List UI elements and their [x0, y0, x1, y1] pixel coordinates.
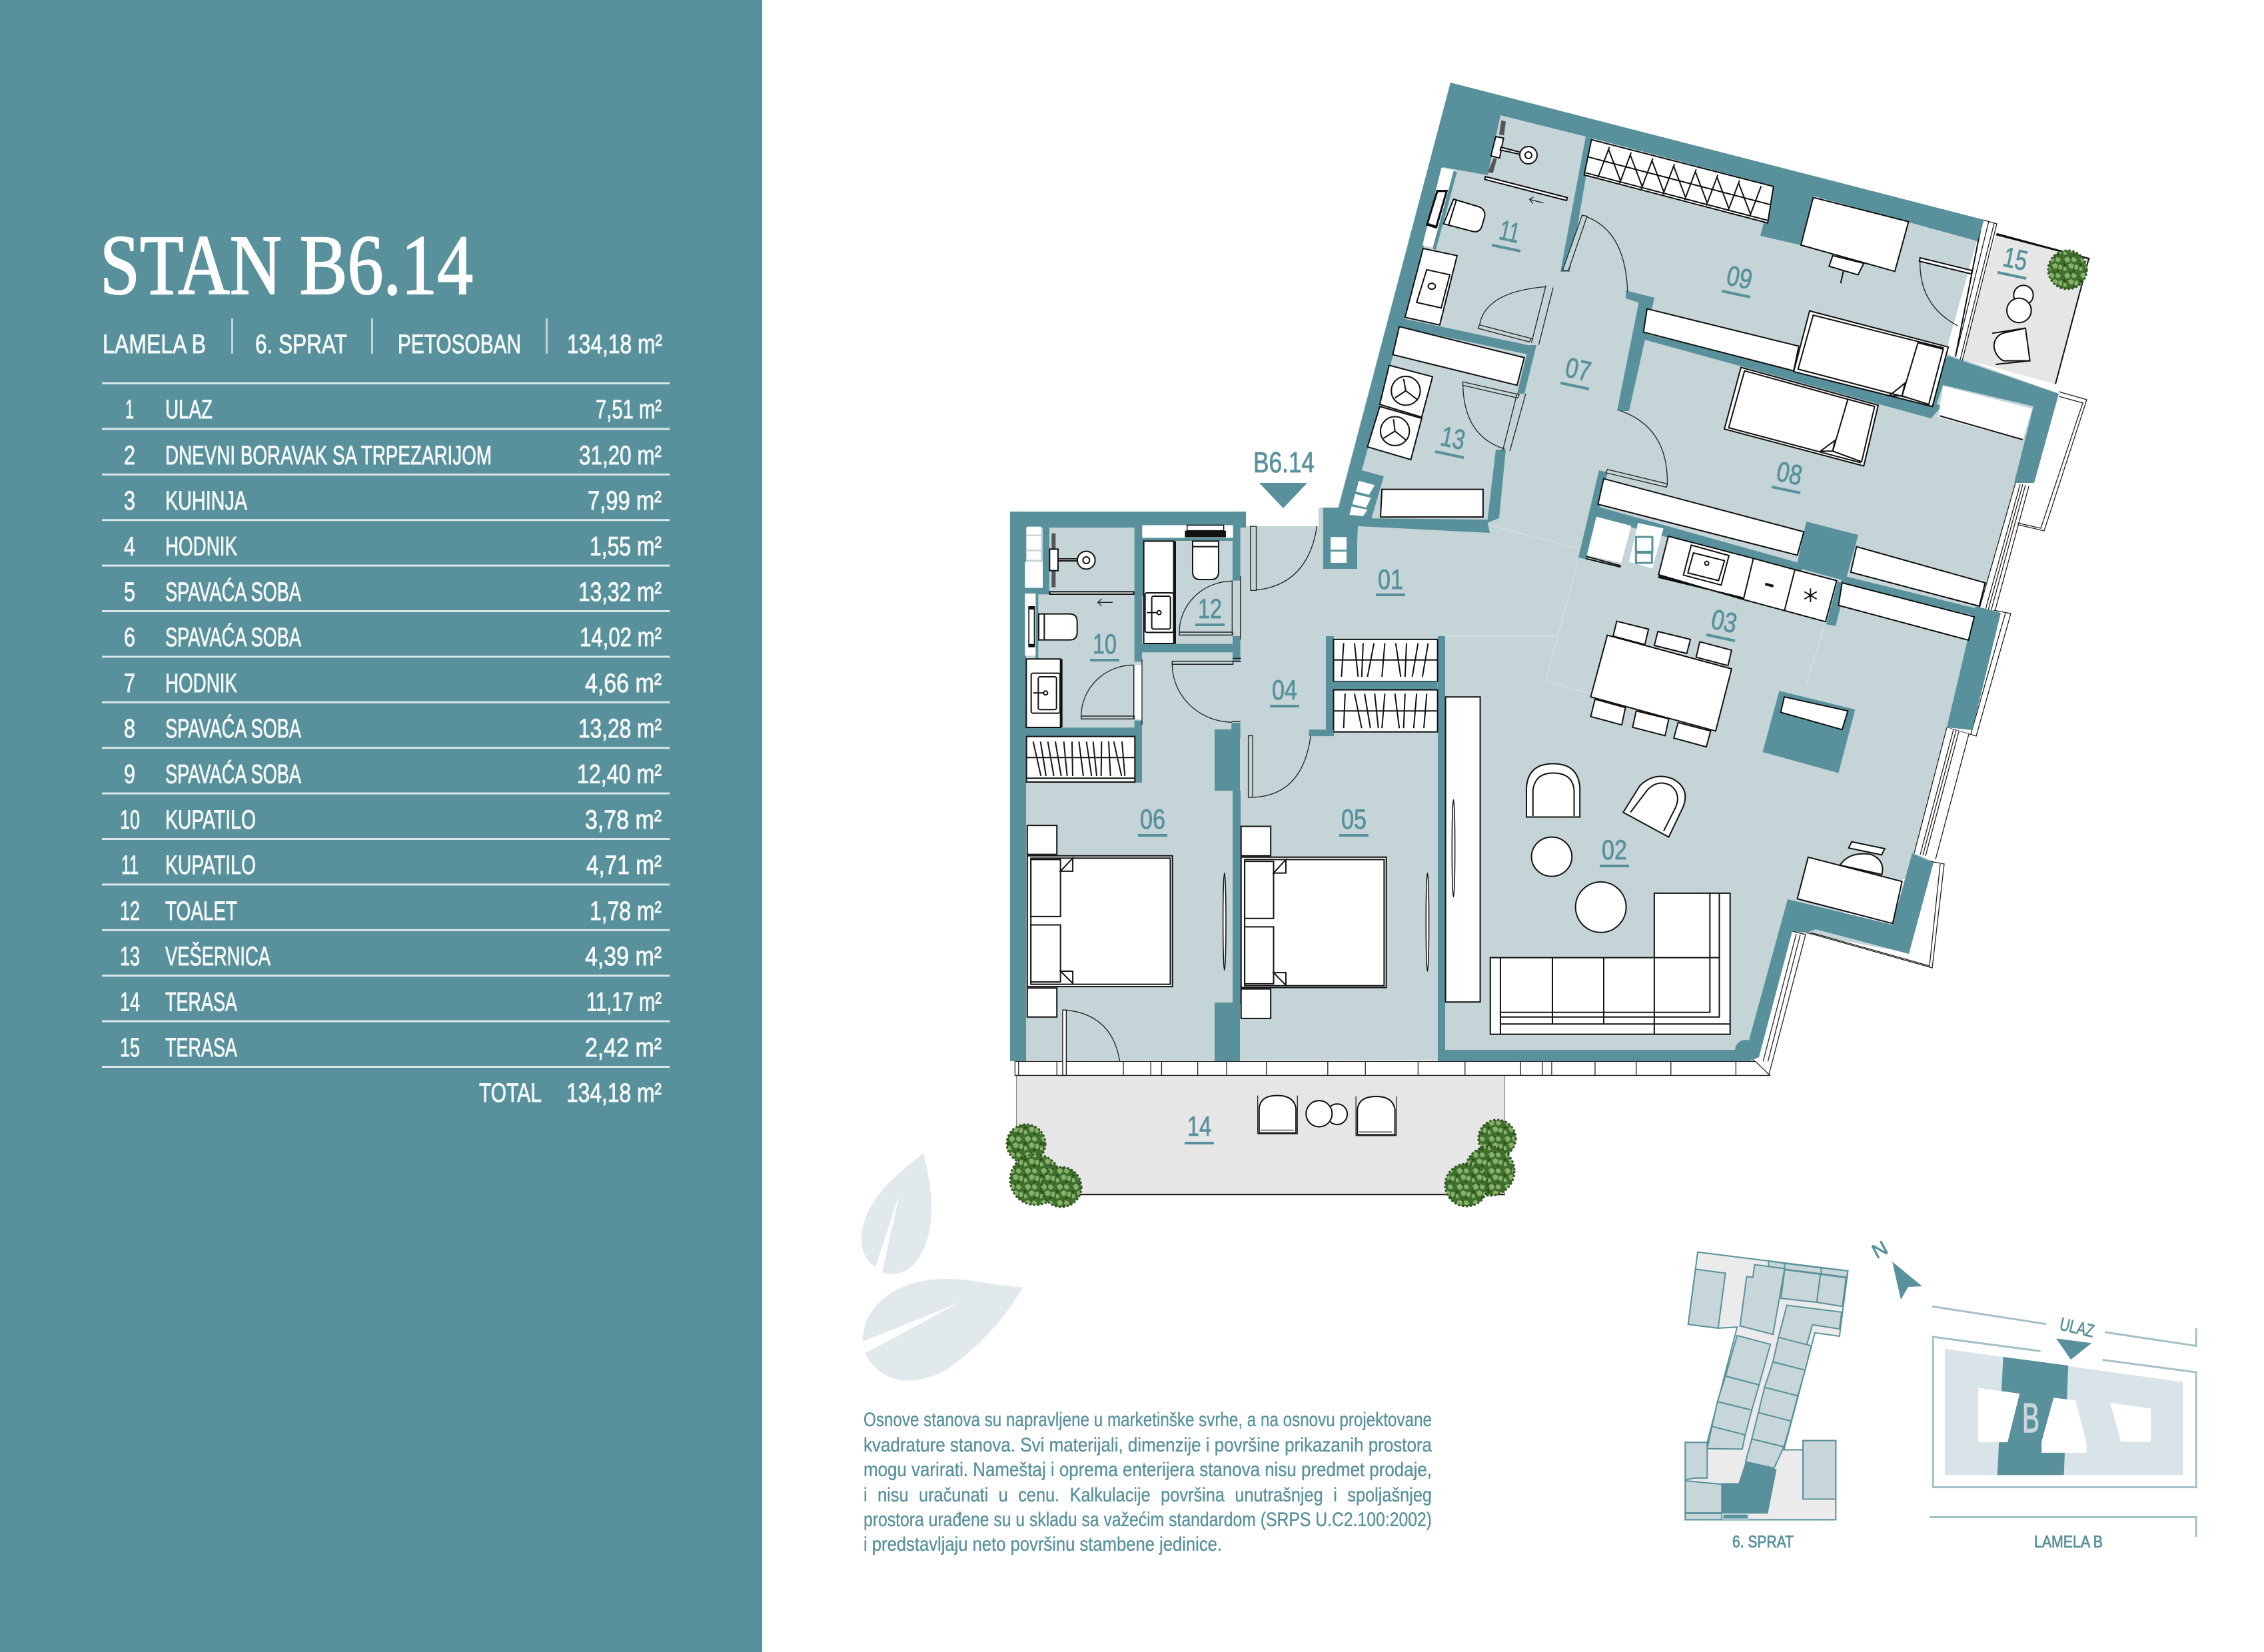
- table: room areas: SPAVAĆA SOBA: [165, 759, 301, 789]
- table: room areas: 15: [120, 1033, 140, 1062]
- table: room areas: 4,39 m²: [585, 942, 662, 971]
- table: room areas: 4,66 m²: [585, 669, 662, 698]
- terrace 15: [1961, 234, 2090, 384]
- table: room areas: TOALET: [165, 897, 237, 926]
- walk-in closets: [1334, 639, 1438, 732]
- title: STAN B6.14: [100, 218, 473, 312]
- table: room areas: 1,55 m²: [590, 532, 662, 561]
- laundry room 13: [1349, 326, 1524, 517]
- closet room 06: [1027, 737, 1135, 782]
- table: room areas: 4,71 m²: [586, 851, 662, 880]
- terrace furniture: [1258, 1096, 1397, 1136]
- table: room areas: 1: [125, 395, 134, 424]
- label 01: 01: [1378, 564, 1403, 595]
- subheader: apartment summary: 134,18 m²: [567, 330, 662, 359]
- label 04: 04: [1272, 674, 1297, 705]
- disclaimer text: i predstavljaju neto površinu stambene jedinice.: [863, 1533, 1222, 1555]
- closet room 09: [1584, 140, 1774, 223]
- table: room areas: 10: [120, 805, 140, 835]
- table: room areas: 1,78 m²: [590, 897, 662, 926]
- table: room areas: 7,51 m²: [596, 395, 662, 424]
- kitchen: [1586, 517, 1837, 621]
- table: room areas: 14,02 m²: [580, 623, 662, 652]
- sofa: [1490, 893, 1730, 1034]
- armchairs: [1526, 764, 1685, 837]
- table: room areas: TOTAL: [479, 1078, 542, 1108]
- label 10: 10: [1093, 628, 1117, 659]
- closet wall stub: [1309, 729, 1334, 736]
- key map: floor 6: 6. SPRAT: [1732, 1533, 1794, 1551]
- key map: lamella B: LAMELA B: [2034, 1533, 2103, 1551]
- table: room areas: KUPATILO: [165, 851, 256, 880]
- south balcony rail: [1015, 1061, 1770, 1075]
- table: room areas: SPAVAĆA SOBA: [165, 577, 301, 607]
- label 12: 12: [1198, 593, 1222, 624]
- bathroom 11: [1422, 121, 1567, 250]
- table: room areas: 6: [124, 623, 135, 652]
- table: room areas: 12,40 m²: [577, 759, 662, 789]
- table: room areas: DNEVNI BORAVAK SA TRPEZARIJOM: [165, 441, 492, 470]
- disclaimer text: kvadrature stanova. Svi materijali, dimenzije i površine prikazanih prostora: [863, 1434, 1432, 1456]
- table: room areas: 4: [124, 532, 135, 561]
- label 06: 06: [1140, 803, 1165, 835]
- table: room areas: KUHINJA: [165, 486, 247, 516]
- label 02: 02: [1602, 834, 1627, 865]
- table: room areas: 3,78 m²: [585, 805, 662, 835]
- disclaimer text: [863, 1409, 1432, 1555]
- label 09: 09: [1724, 260, 1755, 295]
- table: room areas: 8: [124, 714, 135, 743]
- dining table and chairs: [1590, 621, 1732, 747]
- closets room 08: [1598, 309, 2032, 640]
- subheader: apartment summary: 6. SPRAT: [255, 330, 347, 359]
- upper wing doors: [1463, 215, 1972, 549]
- table: room areas: 11: [121, 851, 139, 880]
- label 11: 11: [1496, 214, 1522, 249]
- table: room areas: ULAZ: [165, 395, 213, 424]
- apartment marker B6.14: B6.14: [1253, 446, 1315, 479]
- bed room 06: [1027, 825, 1226, 1017]
- table: room areas: 11,17 m²: [586, 987, 662, 1017]
- key map: lamella B: B: [2022, 1396, 2039, 1442]
- entry and bedroom doors: [1063, 526, 1317, 1075]
- label 03: 03: [1708, 604, 1740, 639]
- key map: lamella B: [1930, 1306, 2196, 1551]
- label 07: 07: [1562, 352, 1594, 387]
- open-plan zone lines: [1444, 560, 1824, 732]
- toilets and sinks: [1026, 525, 1226, 727]
- apartment marker B6.14: [1253, 446, 1315, 508]
- table: room areas: 13,32 m²: [578, 578, 662, 607]
- table: room areas: 13: [120, 942, 140, 971]
- bed room 05: [1241, 827, 1429, 1019]
- table: room areas: 3: [124, 486, 135, 516]
- furniture lower area: [1027, 526, 1902, 1075]
- bed room 09: [1794, 311, 1948, 406]
- disclaimer text: i nisu uračunati u cenu. Kalkulacije površina unutrašnjeg i spoljašnjeg: [863, 1484, 1432, 1506]
- north arrow: N: [1868, 1237, 1892, 1263]
- doors: [1081, 576, 1241, 725]
- table: room areas: 7,99 m²: [588, 486, 662, 516]
- bathroom 11 sink: [1405, 248, 1457, 325]
- disclaimer text: mogu varirati. Nameštaj i oprema enterijera stanova nisu predmet prodaje,: [863, 1459, 1432, 1481]
- subheader: apartment summary: [103, 318, 662, 359]
- room labels: [1090, 213, 2033, 1144]
- coffee tables: [1532, 837, 1626, 933]
- label 15: 15: [2000, 241, 2030, 276]
- panel: left info sidebar: [0, 0, 762, 1652]
- shower: [1049, 534, 1134, 606]
- disclaimer text: Osnove stanova su napravljene u marketinške svrhe, a na osnovu projektovane: [863, 1409, 1432, 1431]
- table: room areas: [102, 382, 670, 1108]
- table: room areas: 31,20 m²: [579, 441, 662, 470]
- entrance shaft cells: [1331, 537, 1347, 563]
- key map: lamella B: ULAZ: [2058, 1314, 2096, 1342]
- key map: floor 6: [1685, 1252, 1848, 1551]
- bed room 08: [1724, 368, 1878, 466]
- floor plan: [1007, 83, 2090, 1207]
- table: room areas: 2,42 m²: [585, 1033, 662, 1062]
- apartment floor: [1010, 83, 2059, 1060]
- desk and chair room 09: [1801, 197, 1909, 283]
- table: room areas: HODNIK: [165, 669, 237, 698]
- plants: [1007, 250, 2087, 1207]
- fireplace block: [1763, 691, 1855, 773]
- glazing and balcony frames: [1015, 220, 2087, 1075]
- label 08: 08: [1774, 456, 1805, 491]
- label 05: 05: [1341, 803, 1367, 835]
- table: room areas: 7: [124, 669, 135, 698]
- subheader: apartment summary: LAMELA B: [103, 330, 206, 359]
- bathrooms 10 and 12: [1025, 525, 1241, 783]
- table: room areas: TERASA: [165, 1033, 237, 1062]
- table: room areas: SPAVAĆA SOBA: [165, 622, 301, 652]
- living room media unit: [1446, 697, 1480, 1002]
- table: room areas: 5: [124, 578, 135, 607]
- table: room areas: 134,18 m²: [566, 1078, 662, 1108]
- disclaimer text: prostora urađene su u skladu sa važećim standardom (SRPS U.C2.100:2002): [863, 1509, 1432, 1531]
- walls: [1010, 83, 2059, 1061]
- subheader: apartment summary: PETOSOBAN: [398, 330, 521, 359]
- terrace 14: [1017, 1074, 1504, 1194]
- table: room areas: 14: [120, 987, 140, 1017]
- table: room areas: 2: [124, 441, 135, 470]
- table: room areas: VEŠERNICA: [165, 941, 271, 971]
- desk and chair: [1798, 842, 1902, 923]
- table: room areas: 13,28 m²: [578, 714, 662, 743]
- table: room areas: KUPATILO: [165, 805, 256, 835]
- table: room areas: HODNIK: [165, 532, 237, 561]
- label 13: 13: [1438, 420, 1468, 456]
- north arrow: [1868, 1237, 1922, 1300]
- table: room areas: TERASA: [165, 987, 237, 1017]
- table: room areas: 9: [124, 759, 135, 789]
- table: room areas: SPAVAĆA SOBA: [165, 713, 301, 743]
- room furniture upper wing: [1349, 140, 2032, 640]
- label 14: 14: [1187, 1110, 1211, 1142]
- decorative leaves: [861, 1153, 1023, 1380]
- table: room areas: 12: [120, 897, 140, 926]
